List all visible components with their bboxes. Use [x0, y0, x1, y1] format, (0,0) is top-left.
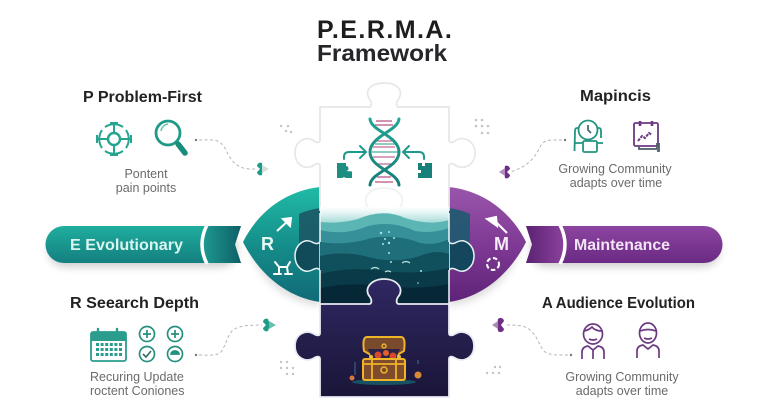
pill: evolutionary	[46, 225, 241, 267]
heading: Mapincis: Mapincis	[580, 88, 651, 105]
label: Maintenance: Maintenance	[574, 237, 670, 254]
icon: dna helix	[370, 119, 399, 185]
panel: right lens M	[449, 187, 526, 306]
connector: audience evolution	[492, 318, 572, 356]
heading: R Seearch Depth: R Seearch Depth	[70, 295, 199, 312]
panel: mapincis	[558, 88, 672, 190]
panel: left lens R	[243, 187, 320, 306]
icon: treasure chest	[350, 337, 422, 385]
icon: person two	[637, 323, 659, 358]
icon: left arrow and puzzle tile	[337, 146, 366, 178]
icon: magnifier	[156, 121, 185, 153]
panel: search depth	[70, 295, 199, 398]
text: growing community two: Growing Community	[565, 370, 679, 384]
connector: problem-first	[195, 139, 269, 175]
letter M: M	[494, 234, 509, 254]
icon: calendar	[91, 329, 126, 361]
text: pain points: Pontent	[124, 167, 168, 181]
title	[317, 16, 453, 66]
bubbles	[380, 231, 422, 284]
puzzle piece: ocean	[295, 207, 474, 304]
pill: maintenance	[526, 225, 722, 267]
text: pain points: pain points	[116, 181, 176, 195]
text: growing community two: adapts over time	[576, 384, 668, 398]
panel: audience evolution	[542, 295, 695, 398]
text: growing community: adapts over time	[570, 176, 662, 190]
icon: nodes	[274, 262, 292, 274]
connector: search depth	[195, 319, 276, 356]
icon: target	[97, 122, 131, 156]
heading: A Audience Evolution: A Audience Evolution	[542, 295, 695, 312]
icon: dashed circle	[487, 258, 499, 270]
icon: person one	[582, 324, 604, 359]
puzzle piece: bottom treasure	[295, 279, 474, 397]
icon: right arrow and puzzle tile	[403, 146, 432, 178]
outer ocean edge lines	[320, 213, 449, 304]
heading: P Problem-First: P Problem-First	[83, 89, 202, 106]
text: growing community: Growing Community	[558, 162, 672, 176]
puzzle piece: top dna	[295, 83, 475, 212]
icon: arrow	[277, 218, 291, 231]
decorative dots	[280, 119, 501, 375]
connector: mapincis	[499, 139, 566, 178]
letter R: R	[261, 234, 274, 254]
panel: problem-first	[83, 89, 202, 195]
left knob	[295, 241, 320, 271]
icon: planner chart	[634, 121, 659, 151]
icons: status circles	[140, 326, 182, 362]
text: recurring update: Recuring Update	[90, 370, 184, 384]
text: recurring update: roctent Coniones	[90, 384, 185, 398]
text: recurring update	[90, 370, 185, 398]
icon: arrow	[487, 217, 507, 233]
label: E Evolutionary: E Evolutionary	[70, 237, 183, 254]
icon: clock device	[574, 120, 603, 152]
title: Framework	[317, 40, 447, 66]
title: P.E.R.M.A.	[317, 16, 453, 44]
right knob	[449, 241, 474, 271]
